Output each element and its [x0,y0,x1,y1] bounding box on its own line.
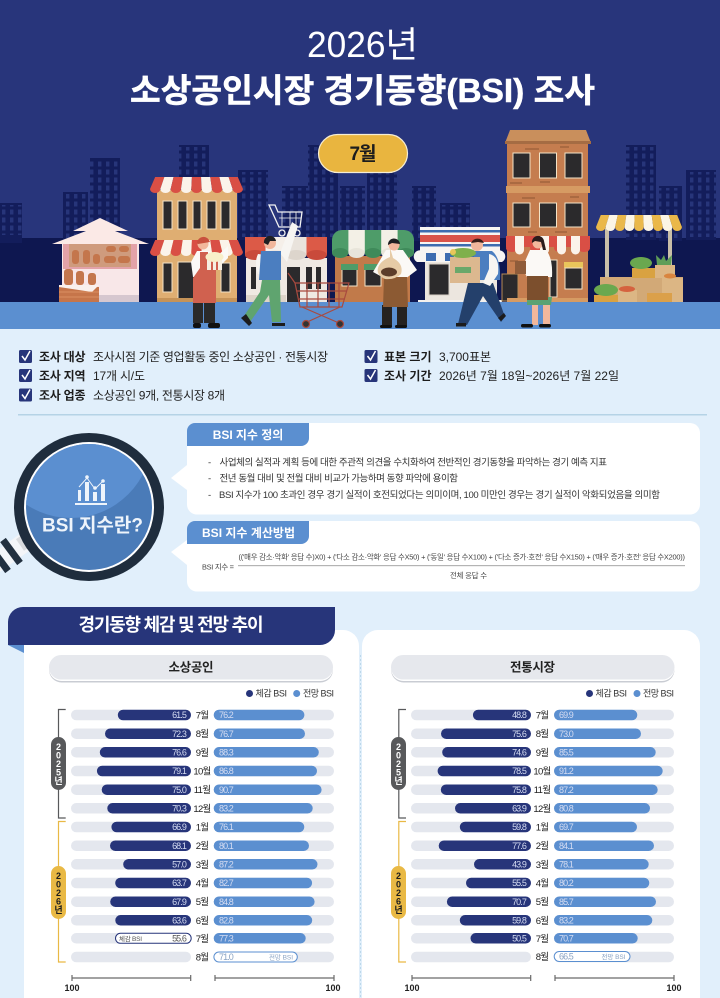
background tracks [71,710,334,962]
building: convenience store [414,227,505,303]
item: industry: 소상공인 9개, 전통시장 8개 [93,388,225,402]
전망 BSI bars: 77.3 [219,934,234,944]
month labels: 10월 [193,766,211,778]
month labels: 8월 [196,952,208,964]
item: region [19,369,145,383]
체감 BSI bars: 61.5 [172,710,187,720]
year bracket: 2026: 6 [396,896,401,906]
체감 BSI bars: 75.8 [512,785,527,795]
chart title pill [49,655,333,682]
tab: BSI 지수 계산방법 [187,521,309,544]
전망 BSI bars: 86.8 [219,766,234,776]
legend [246,688,334,698]
year bracket: 2025 [51,710,66,818]
체감 BSI bars: 75.6 [512,729,527,739]
체감 BSI bars: 59.8 [512,822,527,832]
item: target: 조사 대상 [39,350,86,364]
체감 BSI bars: 43.9 [512,860,527,870]
month labels: 7월 [536,710,548,722]
item: region: 조사 지역 [39,369,86,383]
year bracket: 2026: 6 [56,896,61,906]
month labels: 1월 [536,822,548,834]
전망 BSI bars: 85.7 [559,897,574,907]
header panel: night city market [0,0,720,329]
month labels: 8월 [536,951,548,963]
section heading band: 경기동향 체감 및 전망 추이 [78,615,264,635]
axis: 100 [325,983,341,993]
체감 BSI bars: 48.8 [512,710,527,720]
magnifier: BSI 지수란?: BSI 지수란? [42,514,143,536]
month labels: 12월 [193,803,211,815]
year bracket: 2025: 5 [396,768,401,778]
year bracket: 2026: 2 [396,871,401,881]
전망 BSI bars: 76.2 [219,710,234,720]
month labels: 6월 [536,915,548,927]
legend: 체감 BSI [596,688,627,698]
전망 BSI bars: 76.1 [219,822,234,832]
체감 BSI bars: 57.0 [172,860,187,870]
month labels: 4월 [536,878,548,890]
전망 BSI bars: 83.2 [559,916,574,926]
month labels: 7월 [536,933,548,945]
체감 BSI bars [97,710,191,944]
axis: 100 [666,983,682,993]
체감 BSI bars: 70.3 [172,804,187,814]
체감 BSI bars: 63.6 [172,916,187,926]
체감 BSI bars: 78.5 [512,766,527,776]
전망 BSI bars: 71.0 [219,952,234,962]
definition bullets: 전년 동월 대비 및 전월 대비 비교가 가능하며 동향 파악에 용이함 [220,472,458,484]
전망 BSI bars: 87.2 [559,785,574,795]
year bracket: 2025: 2 [396,742,401,752]
month labels: 2월 [536,840,548,852]
체감 BSI bars: 72.3 [172,729,187,739]
체감 BSI bars: 79.1 [172,766,187,776]
panel: 소상공인 card [24,630,359,998]
year bracket: 2025: 0 [56,750,61,760]
chart title pill [391,655,674,682]
전망 BSI bars: 69.7 [559,822,574,832]
tab: BSI 지수 정의 [187,423,309,446]
year bracket: 2026: 2 [396,888,401,898]
year bracket: 2026 [51,822,66,962]
background tracks [411,710,674,962]
month labels: 9월 [536,747,548,759]
체감 BSI bars: 55.6 [172,934,187,944]
month badge [318,134,408,172]
전망 BSI bars: 82.8 [219,916,234,926]
item: sample size: 3,700표본 [439,350,491,364]
item: period: 조사 기간 [384,368,432,383]
panel: BSI calculation [171,521,700,592]
month labels: 4월 [196,878,208,890]
item: industry [19,388,225,402]
legend [586,688,674,698]
전망 BSI bars: 73.0 [559,729,574,739]
year bracket: 2025 [391,710,406,818]
year bracket: 2025: 2 [56,742,61,752]
character: man with carts [241,205,302,326]
month labels: 11월 [194,784,210,796]
chart: 소상공인 [49,655,341,993]
year bracket: 2025: 년 [54,775,63,786]
formula: (('매우 감소·악화' 응답 수)X0) + ('다소 감소·악화' 응답 수X50) + ('동일' 응답 수X100) + ('다소 증가·호전' 응답 수X150) + ('매우 증가·호전' 응답 수X200)) [238,552,685,562]
전망 BSI bars: 80.1 [219,841,234,851]
month labels: 8월 [196,728,208,740]
year bracket: 2025: 0 [396,750,401,760]
전망 BSI bars [554,710,663,962]
item: sample size [364,349,491,364]
전망 BSI bars: 70.7 [559,934,574,944]
building: tan shop [150,177,243,302]
axis [64,975,341,993]
title year: 2026년 [307,24,418,65]
month labels: 11월 [534,784,550,796]
year bracket: 2025: 5 [56,768,61,778]
item: period: 2026년 7월 18일~2026년 7월 22일 [439,369,619,383]
definition bullets: 사업체의 실적과 계획 등에 대한 주관적 의견을 수치화하여 전반적인 경기동향을 파악하는 경기 예측 지표 [220,456,607,468]
year bracket: 2025: 2 [56,759,61,769]
전망 BSI bars: 91.2 [559,766,574,776]
definition bullets: BSI 지수가 100 초과인 경우 경기 실적이 호전되었다는 의미이며, 100 미만인 경우는 경기 실적이 악화되었음을 의미함 [219,489,660,501]
전망 BSI bars: 83.2 [219,804,234,814]
month labels: 3월 [536,859,548,871]
tab: BSI 지수 정의: BSI 지수 정의 [213,428,283,442]
month labels: 7월 [196,933,208,945]
체감 BSI bars: 50.5 [512,934,527,944]
survey info list [19,349,619,402]
legend: 전망 BSI [303,688,334,698]
tab: BSI 지수 계산방법: BSI 지수 계산방법 [202,526,295,540]
legend: 체감 BSI [256,688,287,698]
icon: red shopping cart [288,273,349,328]
formula [202,552,685,580]
month labels: 1월 [196,822,208,834]
magnifier: BSI 지수란? [0,433,164,581]
체감 BSI bars: 59.8 [512,916,527,926]
year bracket: 2026: 0 [56,880,61,890]
formula: BSI 지수 = [202,562,234,572]
month labels: 5월 [536,896,548,908]
month labels [533,710,551,963]
definition bullets: - [208,490,211,501]
month labels [193,710,211,964]
section heading band [8,607,335,653]
체감 BSI bars: 63.9 [512,804,527,814]
month labels: 6월 [196,915,208,927]
item: industry: 조사 업종 [39,388,86,402]
전망 BSI bars: 전망 BSI [602,952,626,961]
icon: bar chart [75,475,107,505]
month labels: 2월 [196,840,208,852]
formula: 전체 응답 수 [450,571,487,580]
체감 BSI bars: 70.7 [512,897,527,907]
전망 BSI bars: 87.2 [219,860,234,870]
produce stall [594,215,683,307]
year bracket: 2026: 2 [56,888,61,898]
month labels: 12월 [533,803,551,815]
building: white shop with red awning [245,237,327,302]
전망 BSI bars: 78.1 [559,860,574,870]
전망 BSI bars [214,710,322,962]
month labels: 5월 [196,896,208,908]
chart title pill: 전통시장 [510,660,555,674]
전망 BSI bars: 88.3 [219,748,234,758]
chart: 전통시장 [391,655,682,993]
panel: 전통시장 card [362,630,700,998]
전망 BSI bars: 84.8 [219,897,234,907]
year bracket: 2026 [391,822,406,962]
year bracket: 2026: 년 [54,904,63,915]
axis: 100 [404,983,420,993]
체감 BSI bars [438,710,531,944]
character: man with box [450,239,506,326]
character: shopkeeper with sack [373,238,417,328]
legend: 전망 BSI [643,688,674,698]
전망 BSI bars: 85.5 [559,748,574,758]
체감 BSI bars: 66.9 [172,822,187,832]
전망 BSI bars: 66.5 [559,952,574,962]
year bracket: 2026: 년 [394,904,403,915]
building: brick shop with green awning [332,230,414,302]
item: period [364,368,619,383]
month labels: 10월 [533,766,551,778]
chart title pill: 소상공인 [168,660,214,674]
definition bullets [208,456,660,501]
item: region: 17개 시/도 [93,369,145,383]
체감 BSI bars: 67.9 [172,897,187,907]
year bracket: 2026: 2 [56,871,61,881]
전망 BSI bars: 80.8 [559,804,574,814]
전망 BSI bars: 90.7 [219,785,234,795]
전망 BSI bars: 전망 BSI [269,953,293,962]
체감 BSI bars: 74.6 [512,748,527,758]
item: sample size: 표본 크기 [384,349,432,364]
전망 BSI bars: 69.9 [559,710,574,720]
month labels: 7월 [196,710,208,722]
character: woman with popcorn [191,237,228,328]
panel: BSI definition [171,423,700,514]
체감 BSI bars: 75.0 [172,785,187,795]
skyline towers [0,145,720,302]
체감 BSI bars: 68.1 [172,841,187,851]
체감 BSI bars: 체감 BSI [119,935,142,943]
전망 BSI bars: 80.2 [559,878,574,888]
definition bullets: - [208,458,211,468]
axis [404,975,682,993]
체감 BSI bars: 76.6 [172,748,187,758]
main title: 소상공인시장 경기동향(BSI) 조사 [130,72,595,109]
체감 BSI bars: 55.5 [512,878,527,888]
definition bullets: - [208,474,211,484]
전망 BSI bars: 84.1 [559,841,574,851]
체감 BSI bars: 77.6 [512,841,527,851]
month labels: 8월 [536,728,548,740]
market stall: pink tent [52,218,149,302]
character: woman with clipboard [515,236,552,328]
year bracket: 2025: 2 [396,759,401,769]
month labels: 3월 [196,859,208,871]
체감 BSI bars: 63.7 [172,878,187,888]
road [0,302,720,329]
month badge: 7월 [349,143,376,165]
전망 BSI bars: 76.7 [219,729,234,739]
month labels: 9월 [196,747,208,759]
year bracket: 2025: 년 [394,775,403,786]
item: target: 조사시점 기준 영업활동 중인 소상공인 · 전통시장 [93,350,328,364]
year bracket: 2026: 0 [396,880,401,890]
building: tall brick tower [502,130,591,303]
전망 BSI bars: 82.7 [219,878,234,888]
axis: 100 [64,983,80,993]
